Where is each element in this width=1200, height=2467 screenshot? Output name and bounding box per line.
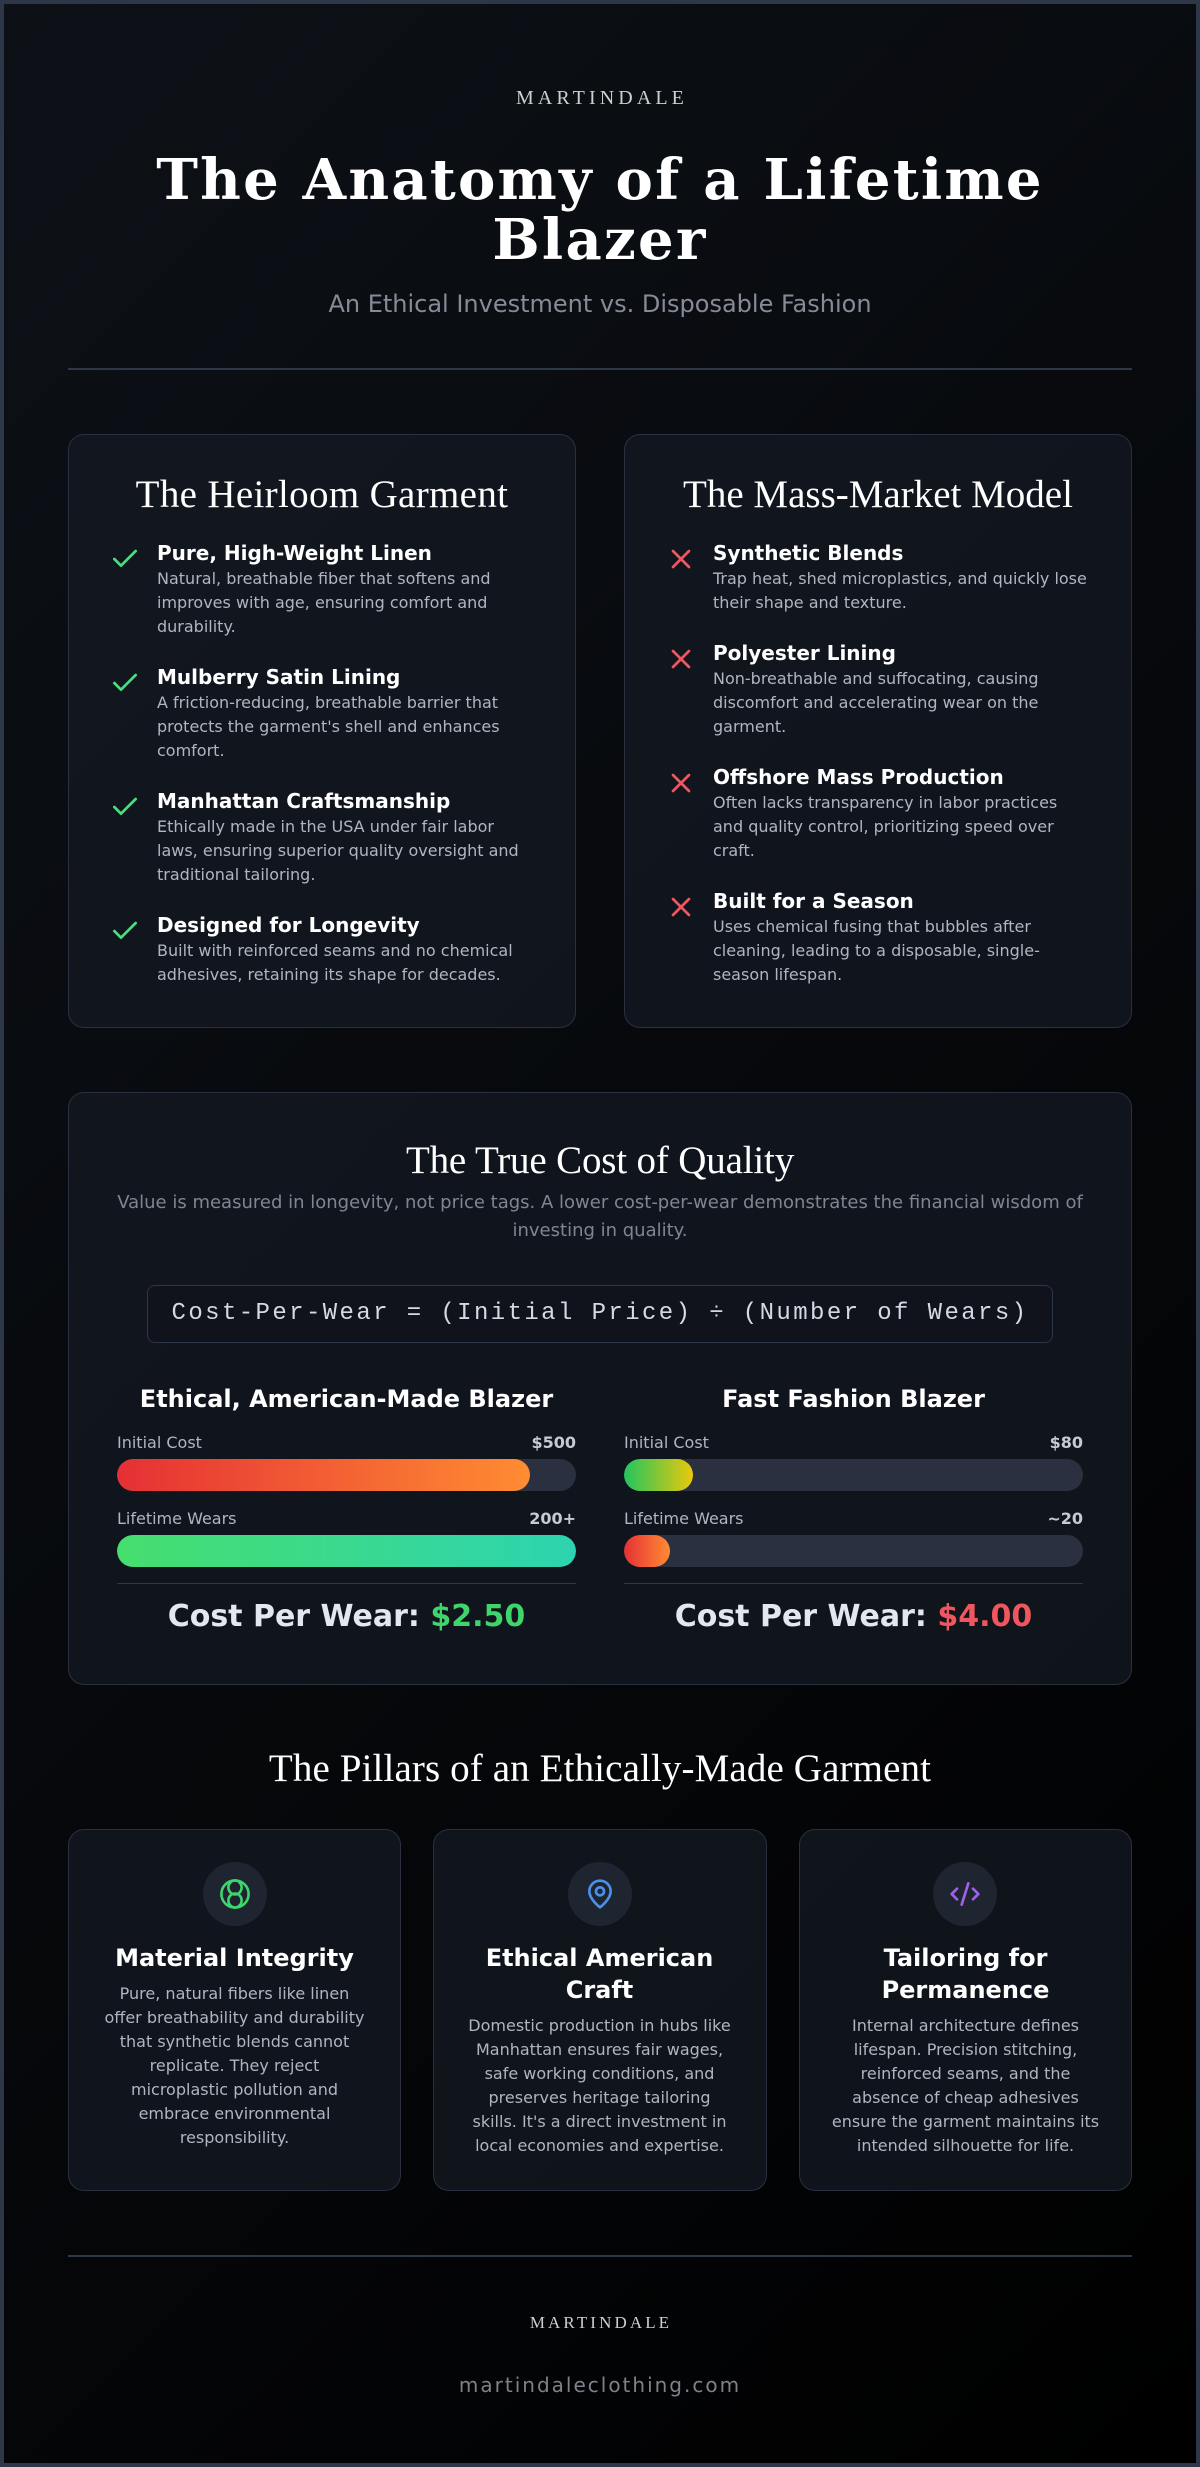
item: polyester lining: garment. (713, 716, 786, 736)
formula box (147, 1285, 1053, 1343)
item: mulberry lining: protects the garment's shell and enhances (157, 716, 500, 736)
item: synthetic blends: Trap heat, shed microplastics, and quickly lose (713, 568, 1087, 588)
item: built for a season: cleaning, leading to a disposable, single- (713, 940, 1040, 960)
header logo: MARTINDALE (516, 87, 688, 109)
lifetime wears row (117, 1509, 576, 1567)
title: Blazer (492, 207, 708, 273)
item: pure linen: durability. (157, 616, 236, 636)
initial cost row: $500 (531, 1433, 576, 1452)
panel: the mass-market model (624, 434, 1132, 1028)
panel: the heirloom garment (68, 434, 576, 1028)
pillar text: offer breathability and durability (104, 2008, 364, 2027)
item: polyester lining: Non-breathable and suffocating, causing (713, 668, 1039, 688)
pillar text: reinforced seams, and the (861, 2064, 1070, 2083)
pillar text: skills. It's a direct investment in (472, 2112, 726, 2131)
item: polyester lining: Polyester Lining (713, 641, 896, 665)
item: polyester lining (672, 641, 1039, 736)
item: pure linen: improves with age, ensuring comfort and (157, 592, 487, 612)
pillar title: Material Integrity (115, 1944, 354, 1972)
item: manhattan craftsmanship (112, 789, 519, 884)
pillar text (468, 2016, 731, 2155)
item: built for a season (672, 889, 1040, 984)
item: synthetic blends: Synthetic Blends (713, 541, 903, 565)
pillar text: safe working conditions, and (485, 2064, 714, 2083)
column heading: Ethical, American-Made Blazer (140, 1384, 553, 1412)
website: martindaleclothing.com (459, 2373, 741, 2397)
subtitle: An Ethical Investment vs. Disposable Fashion (328, 290, 872, 318)
item: manhattan craftsmanship: laws, ensuring superior quality oversight and (157, 840, 519, 860)
pillar text: local economies and expertise. (475, 2136, 724, 2155)
pillar title (486, 1944, 713, 2004)
pillar text: Internal architecture defines (852, 2016, 1079, 2035)
icon: code stitching (933, 1862, 997, 1926)
item: offshore mass production: Often lacks transparency in labor practices (713, 792, 1057, 812)
lifetime wears row: Lifetime Wears (624, 1509, 744, 1528)
item: built for a season: season lifespan. (713, 964, 842, 984)
formula box: Cost-Per-Wear = (Initial Price) ÷ (Number of Wears) (172, 1300, 1028, 1327)
lifetime wears row (624, 1509, 1083, 1567)
icon: map pin (568, 1862, 632, 1926)
icon: fiber circle (203, 1862, 267, 1926)
pillar title: Craft (566, 1976, 633, 2004)
item: manhattan craftsmanship: Manhattan Craftsmanship (157, 789, 450, 813)
item: built for a season: Uses chemical fusing that bubbles after (713, 916, 1031, 936)
heading: true cost of quality: The True Cost of Quality (406, 1139, 794, 1182)
item: offshore mass production: and quality control, prioritizing speed over (713, 816, 1054, 836)
pillar title (882, 1944, 1049, 2004)
panel: ethical american craft (433, 1829, 767, 2191)
panel: tailoring for permanence (799, 1829, 1132, 2191)
divider and cost per wear (624, 1583, 1083, 1643)
title: The Anatomy of a Lifetime (156, 147, 1044, 213)
item: mulberry lining: Mulberry Satin Lining (157, 665, 400, 689)
pillar title: Tailoring for (884, 1944, 1047, 1972)
pillar text: microplastic pollution and (131, 2080, 338, 2099)
heading: the heirloom garment: The Heirloom Garment (136, 473, 508, 516)
pillar title: Ethical American (486, 1944, 713, 1972)
header divider (68, 368, 1132, 370)
pillar text: lifespan. Precision stitching, (854, 2040, 1077, 2059)
pillar text: Pure, natural fibers like linen (120, 1984, 349, 2003)
footer logo: MARTINDALE (530, 2312, 672, 2332)
description (117, 1192, 1084, 1241)
pillar text: absence of cheap adhesives (852, 2088, 1079, 2107)
lifetime wears row: Lifetime Wears (117, 1509, 237, 1528)
pillar text: intended silhouette for life. (857, 2136, 1074, 2155)
panel: material integrity (68, 1829, 401, 2191)
lifetime wears row: ~20 (1047, 1509, 1083, 1528)
footer divider (68, 2255, 1132, 2257)
description: investing in quality. (512, 1220, 688, 1241)
title (156, 147, 1044, 273)
item: mulberry lining (112, 665, 500, 760)
initial cost row (117, 1433, 576, 1491)
pillar text (832, 2016, 1099, 2155)
item: designed for longevity: adhesives, retaining its shape for decades. (157, 964, 501, 984)
item: synthetic blends: their shape and texture. (713, 592, 907, 612)
item: pure linen (112, 541, 491, 636)
description: Value is measured in longevity, not price tags. A lower cost-per-wear demonstrates the financial wisdom of (117, 1192, 1083, 1213)
item: polyester lining: discomfort and accelerating wear on the (713, 692, 1038, 712)
column: fast fashion blazer (624, 1384, 1083, 1634)
heading: the mass-market model: The Mass-Market Model (683, 473, 1073, 516)
item: designed for longevity: Built with reinforced seams and no chemical (157, 940, 513, 960)
item: built for a season: Built for a Season (713, 889, 914, 913)
pillar text: ensure the garment maintains its (832, 2112, 1099, 2131)
pillar title: Permanence (882, 1976, 1049, 2004)
initial cost row: Initial Cost (117, 1433, 202, 1452)
pillar text: Domestic production in hubs like (468, 2016, 731, 2035)
initial cost row: $80 (1050, 1433, 1083, 1452)
item: manhattan craftsmanship: traditional tailoring. (157, 864, 315, 884)
initial cost row: Initial Cost (624, 1433, 709, 1452)
item: designed for longevity (112, 913, 513, 984)
pillar text (104, 1984, 364, 2147)
pillar text: embrace environmental (139, 2104, 330, 2123)
item: mulberry lining: comfort. (157, 740, 225, 760)
item: offshore mass production: Offshore Mass Production (713, 765, 1004, 789)
divider and cost per wear: Cost Per Wear: $2.50 (168, 1599, 525, 1634)
pillar text: Manhattan ensures fair wages, (476, 2040, 723, 2059)
item: offshore mass production (672, 765, 1057, 860)
pillar text: that synthetic blends cannot (120, 2032, 349, 2051)
pillar text: responsibility. (180, 2128, 289, 2147)
heading: pillars: The Pillars of an Ethically-Made Garment (269, 1746, 931, 1790)
column: ethical blazer (117, 1384, 576, 1634)
item: mulberry lining: A friction-reducing, breathable barrier that (157, 692, 498, 712)
item: pure linen: Pure, High-Weight Linen (157, 541, 432, 565)
item: designed for longevity: Designed for Longevity (157, 913, 420, 937)
pillar text: preserves heritage tailoring (489, 2088, 710, 2107)
divider and cost per wear (117, 1583, 576, 1643)
item: pure linen: Natural, breathable fiber that softens and (157, 568, 491, 588)
item: synthetic blends (672, 541, 1087, 612)
lifetime wears row: 200+ (529, 1509, 576, 1528)
initial cost row (624, 1433, 1083, 1491)
divider and cost per wear: Cost Per Wear: $4.00 (675, 1599, 1032, 1634)
pillar text: replicate. They reject (150, 2056, 319, 2075)
panel: true cost of quality (68, 1092, 1132, 1685)
column heading: Fast Fashion Blazer (722, 1384, 985, 1412)
item: offshore mass production: craft. (713, 840, 755, 860)
item: manhattan craftsmanship: Ethically made in the USA under fair labor (157, 816, 494, 836)
